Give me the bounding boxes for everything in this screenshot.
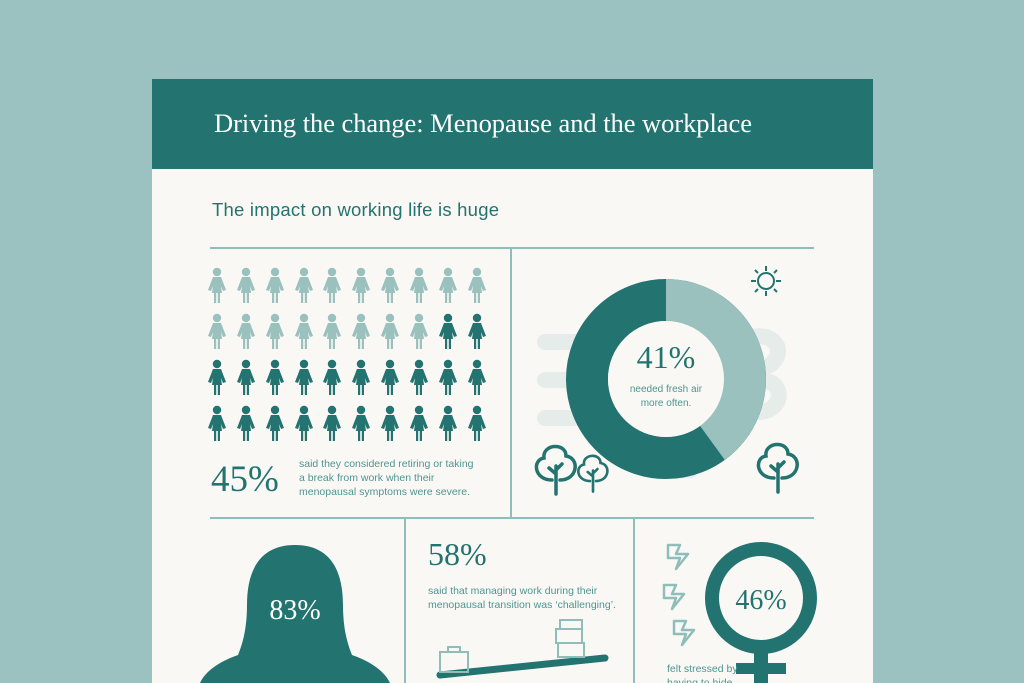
title: Driving the change: Menopause and the workplace [214,108,752,138]
panel: 83% woman [200,545,390,683]
panel: donut fresh air: 41% [637,339,695,375]
panel: donut fresh air: needed fresh air [630,384,703,395]
icon: trees [536,444,797,494]
subtitle: The impact on working life is huge [212,199,499,220]
panel: people grid [208,268,486,500]
panel: donut fresh air [536,266,797,494]
panel: 58% seesaw: said that managing work during their [428,585,598,597]
panel: 46% female symbol [664,545,810,683]
panel: donut fresh air: more often. [641,398,691,409]
panel: people grid: a break from work when their [299,472,435,484]
panel: 58% seesaw [428,536,616,675]
stat 45%: 45% [211,459,279,500]
card [152,79,873,683]
panel: 46% female symbol: felt stressed by [667,663,738,675]
panel: 58% seesaw: menopausal transition was ‘challenging’. [428,599,616,611]
panel: 58% seesaw: 58% [428,536,487,572]
panel: people grid: said they considered retiring or taking [299,458,474,470]
panel: 83% woman: 83% [269,595,321,626]
panel: 46% female symbol: 46% [735,585,787,616]
panel: people grid: menopausal symptoms were severe. [299,486,470,498]
icon: sun [751,266,781,296]
header bar [152,79,873,169]
